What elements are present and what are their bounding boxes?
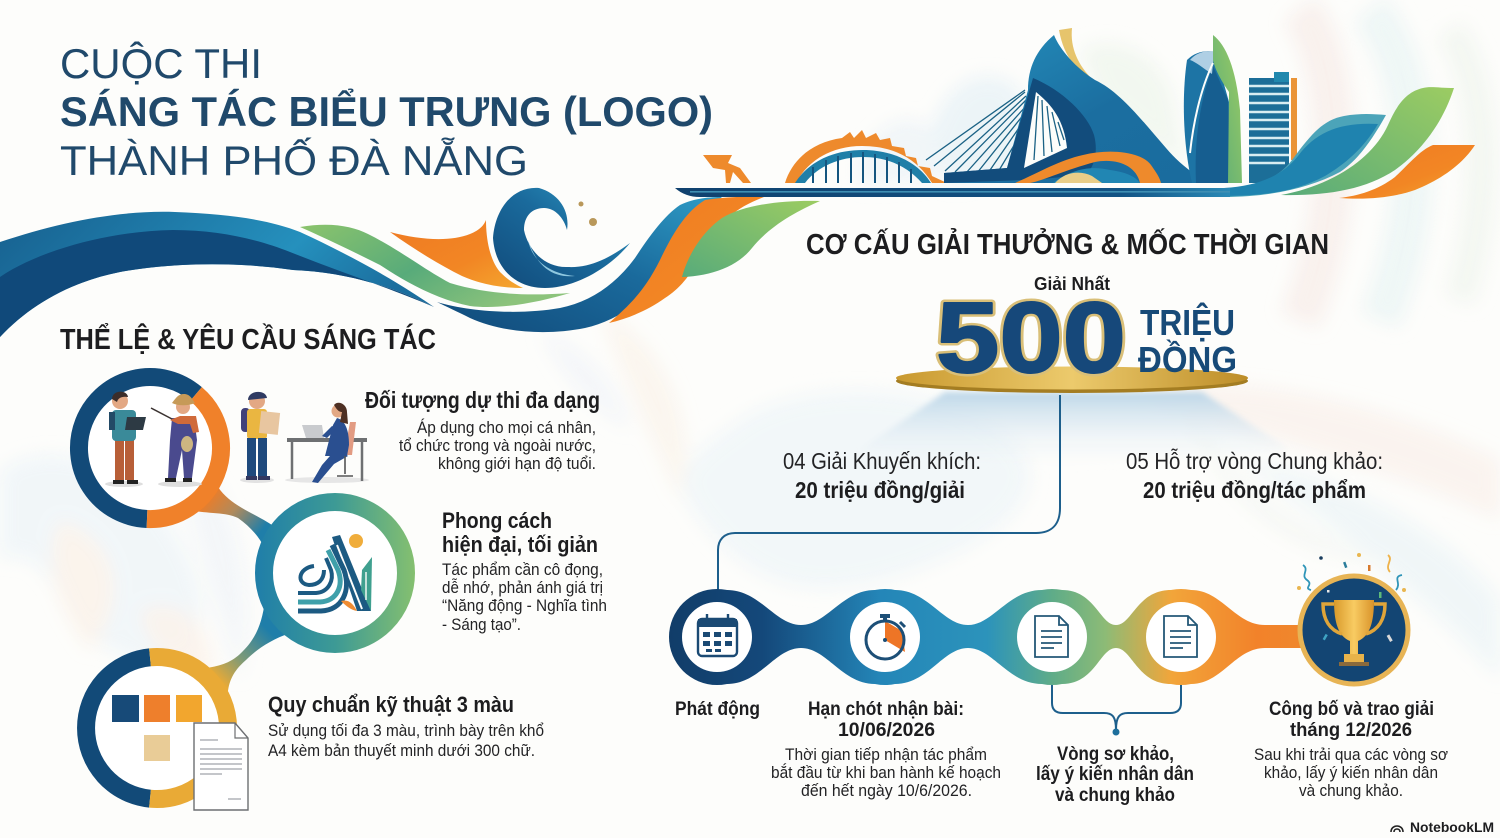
review label: và chung khảo <box>1055 785 1175 806</box>
text: style: dễ nhớ, phản ánh giá trị <box>442 578 603 597</box>
text: participants <box>365 387 600 473</box>
heading: prizes: CƠ CẤU GIẢI THƯỞNG & MỐC THỜI GIAN <box>806 227 1329 261</box>
deadline text: bắt đầu từ khi ban hành kế hoạch <box>771 763 1001 782</box>
prize amount: ĐỒNG <box>1138 338 1237 380</box>
bracket dot <box>1112 728 1120 736</box>
deadline text <box>771 699 1001 800</box>
prize amount <box>936 282 1237 394</box>
deadline text: đến hết ngày 10/6/2026. <box>801 781 972 800</box>
final round support: 20 triệu đồng/tác phẩm <box>1143 477 1366 503</box>
deadline text: 10/06/2026 <box>838 720 935 741</box>
orange swoosh <box>1339 145 1475 199</box>
icon: stopwatch <box>866 614 905 659</box>
lower blue sweep <box>437 197 722 332</box>
bridge cables <box>926 90 1026 173</box>
final round support <box>1126 448 1383 503</box>
text: participants: Áp dụng cho mọi cá nhân, <box>417 418 596 437</box>
title: SÁNG TÁC BIỂU TRƯNG (LOGO) <box>60 87 713 135</box>
award text: Công bố và trao giải <box>1269 699 1434 720</box>
timeline band <box>669 589 1320 685</box>
high-rise building <box>1249 72 1297 183</box>
review label: lấy ý kiến nhân dân <box>1036 764 1194 785</box>
watermark: NotebookLM <box>1410 819 1494 835</box>
deadline text: Hạn chót nhận bài: <box>808 699 964 720</box>
trophy medallion <box>1300 576 1408 684</box>
label: first prize: Giải Nhất <box>1034 274 1110 294</box>
award text: tháng 12/2026 <box>1290 720 1412 741</box>
prize amount: 500 <box>936 282 1126 394</box>
text: style: Phong cách <box>442 508 552 533</box>
green swoosh <box>1281 87 1454 195</box>
step: preliminary round <box>1017 602 1087 672</box>
title: THÀNH PHỐ ĐÀ NẴNG <box>60 136 528 184</box>
step: deadline <box>771 602 1001 800</box>
text: style: hiện đại, tối giản <box>442 532 598 557</box>
label: Phát động <box>675 699 760 720</box>
foam dots <box>578 202 597 226</box>
prize amount: TRIỆU <box>1140 301 1235 343</box>
twin towers <box>1184 35 1242 183</box>
review bracket <box>1052 685 1181 730</box>
document icon <box>194 723 248 810</box>
node: technical <box>86 657 248 810</box>
gold sail <box>1059 28 1093 80</box>
step: launch <box>675 602 760 720</box>
wave banner <box>0 188 820 337</box>
incentive prizes <box>783 448 981 503</box>
person with notepad <box>240 392 280 483</box>
person with hat <box>151 394 202 487</box>
person at desk <box>285 403 369 483</box>
deadline text: Thời gian tiếp nhận tác phẩm <box>785 745 987 764</box>
dragon head <box>703 155 751 183</box>
podium <box>896 366 1248 393</box>
ring <box>79 377 221 519</box>
icon: document <box>1035 616 1068 657</box>
A letterform <box>332 535 371 611</box>
orange arc <box>1015 152 1161 183</box>
incentive prizes: 20 triệu đồng/giải <box>795 477 965 503</box>
icon: document <box>1164 616 1197 657</box>
text: style <box>442 508 607 634</box>
prize amount: 500 <box>936 282 1126 394</box>
main blue wave <box>0 212 434 337</box>
text: participants: Đối tượng dự thi đa dạng <box>365 387 600 413</box>
panel: contest rules <box>60 322 607 810</box>
icon: trophy <box>1323 600 1385 666</box>
node: style <box>264 502 406 644</box>
award text: Sau khi trải qua các vòng sơ <box>1254 745 1448 764</box>
review label <box>1036 744 1194 806</box>
logo mark <box>298 534 372 611</box>
dragon bridge arch <box>785 130 947 183</box>
text: participants: tổ chức trong và ngoài nước, <box>399 436 596 455</box>
confetti <box>1297 553 1406 642</box>
text: style: - Sáng tạo”. <box>442 615 521 634</box>
text: style: Tác phẩm cần cô đọng, <box>442 560 603 579</box>
node: participants <box>79 377 369 519</box>
orange wave crest <box>390 220 523 288</box>
colour swatches <box>112 695 202 761</box>
review label: Vòng sơ khảo, <box>1057 744 1174 765</box>
teal swoosh <box>1224 114 1386 197</box>
icon: calendar <box>698 614 737 656</box>
award text: khảo, lấy ý kiến nhân dân <box>1264 763 1438 782</box>
person with tablet <box>105 392 146 487</box>
text: technical: A4 kèm bản thuyết minh dưới 300 chữ. <box>268 741 535 760</box>
connector line to timeline <box>718 395 1060 592</box>
incentive prizes: 04 Giải Khuyến khích: <box>783 448 981 474</box>
heading: rules: THỂ LỆ & YÊU CẦU SÁNG TÁC <box>60 322 436 356</box>
step: award <box>1254 553 1448 800</box>
curl wave <box>493 188 630 288</box>
ring <box>86 657 228 799</box>
skyline illustration <box>675 28 1475 199</box>
ring <box>264 502 406 644</box>
connectors between nodes <box>190 487 290 705</box>
title <box>60 40 713 184</box>
final round support: 05 Hỗ trợ vòng Chung khảo: <box>1126 448 1383 474</box>
title: CUỘC THI <box>60 40 262 87</box>
orange ribbon <box>609 197 764 323</box>
green wave <box>300 225 570 307</box>
deck <box>675 188 1230 197</box>
green leaf <box>682 201 820 277</box>
text: style: “Năng động - Nghĩa tình <box>442 596 607 615</box>
sail tower <box>944 35 1208 183</box>
award text <box>1254 699 1448 800</box>
step: final round <box>1146 602 1216 672</box>
text: technical: Quy chuẩn kỹ thuật 3 màu <box>268 692 514 717</box>
panel: prizes and timeline <box>669 227 1448 806</box>
text: technical: Sử dụng tối đa 3 màu, trình bày trên khổ <box>268 721 544 740</box>
white gap under sail <box>1024 92 1067 168</box>
text: technical <box>268 692 544 760</box>
award text: và chung khảo. <box>1299 781 1403 800</box>
icon: notebook mark <box>1391 826 1403 832</box>
podium shadow <box>860 392 1290 470</box>
text: participants: không giới hạn độ tuổi. <box>438 454 596 473</box>
